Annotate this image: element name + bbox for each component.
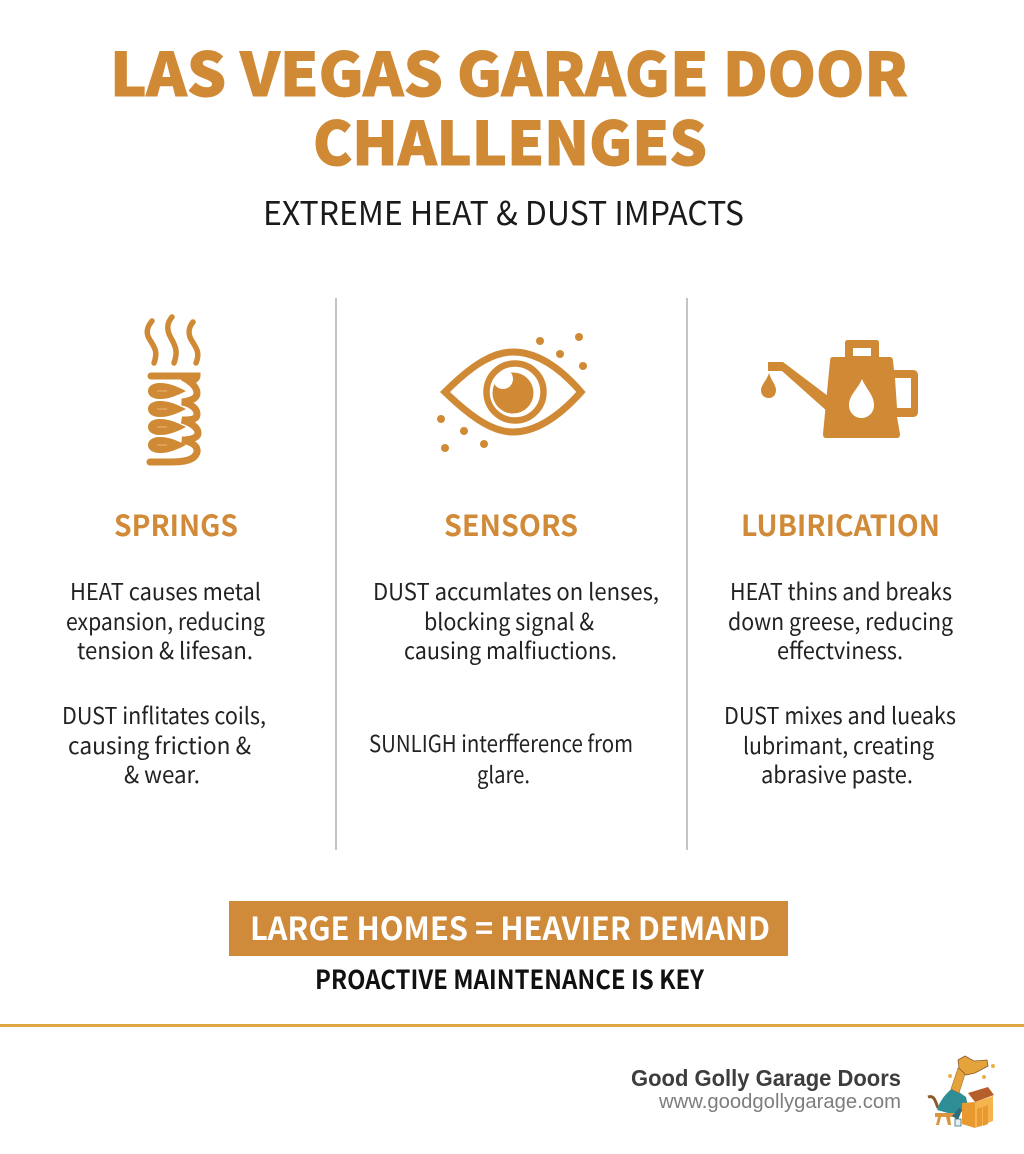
- footer brand: [631, 1065, 901, 1113]
- panel: springs: & wear.: [124, 756, 200, 790]
- panel: sensors: blocking signal &: [424, 603, 594, 637]
- callout: proactive maintenance: PROACTIVE MAINTENANCE IS KEY: [315, 960, 705, 997]
- panel: lubrication: abrasive paste.: [761, 756, 913, 790]
- panel: lubrication: lubrimant, creating: [743, 727, 934, 761]
- panel: sensors: glare.: [477, 756, 530, 790]
- panel: lubrication: [724, 503, 956, 790]
- footer brand: www.goodgollygarage.com: [658, 1091, 901, 1113]
- panel: springs: DUST inflitates coils,: [62, 697, 266, 731]
- title: [110, 27, 908, 183]
- panel: lubrication: effectviness.: [777, 632, 903, 666]
- panel: sensors: SENSORS: [444, 503, 578, 545]
- panel: sensors: causing malfiuctions.: [404, 632, 617, 666]
- panel: sensors: DUST accumlates on lenses,: [373, 573, 659, 607]
- panel: lubrication: HEAT thins and breaks: [730, 573, 952, 607]
- panel: springs: expansion, reducing: [66, 603, 265, 637]
- panel: lubrication: LUBIRICATION: [741, 503, 940, 545]
- banner: large homes: LARGE HOMES = HEAVIER DEMAND: [250, 904, 770, 950]
- panel: springs: tension & lifesan.: [77, 632, 253, 666]
- icon: oil can: [761, 340, 918, 438]
- panel: springs: causing friction &: [68, 727, 251, 761]
- icon: eye with dust: [437, 333, 587, 452]
- panel: springs: HEAT causes metal: [70, 573, 261, 607]
- panel: lubrication: down greese, reducing: [728, 603, 953, 637]
- icon: hot spring: [147, 317, 198, 462]
- subtitle: EXTREME HEAT & DUST IMPACTS: [263, 187, 744, 235]
- footer brand: Good Golly Garage Doors: [631, 1065, 901, 1091]
- footer rule: [0, 1024, 1024, 1027]
- panel: sensors: SUNLIGH interfference from: [369, 725, 633, 759]
- panel: springs: [62, 503, 266, 790]
- title: LAS VEGAS GARAGE DOOR: [110, 27, 908, 114]
- column dividers: [335, 298, 688, 850]
- icon: giraffe logo: [928, 1056, 995, 1128]
- title: CHALLENGES: [313, 96, 707, 183]
- panel: lubrication: DUST mixes and lueaks: [724, 697, 956, 731]
- panel: sensors: [369, 503, 659, 790]
- panel: springs: SPRINGS: [114, 503, 238, 545]
